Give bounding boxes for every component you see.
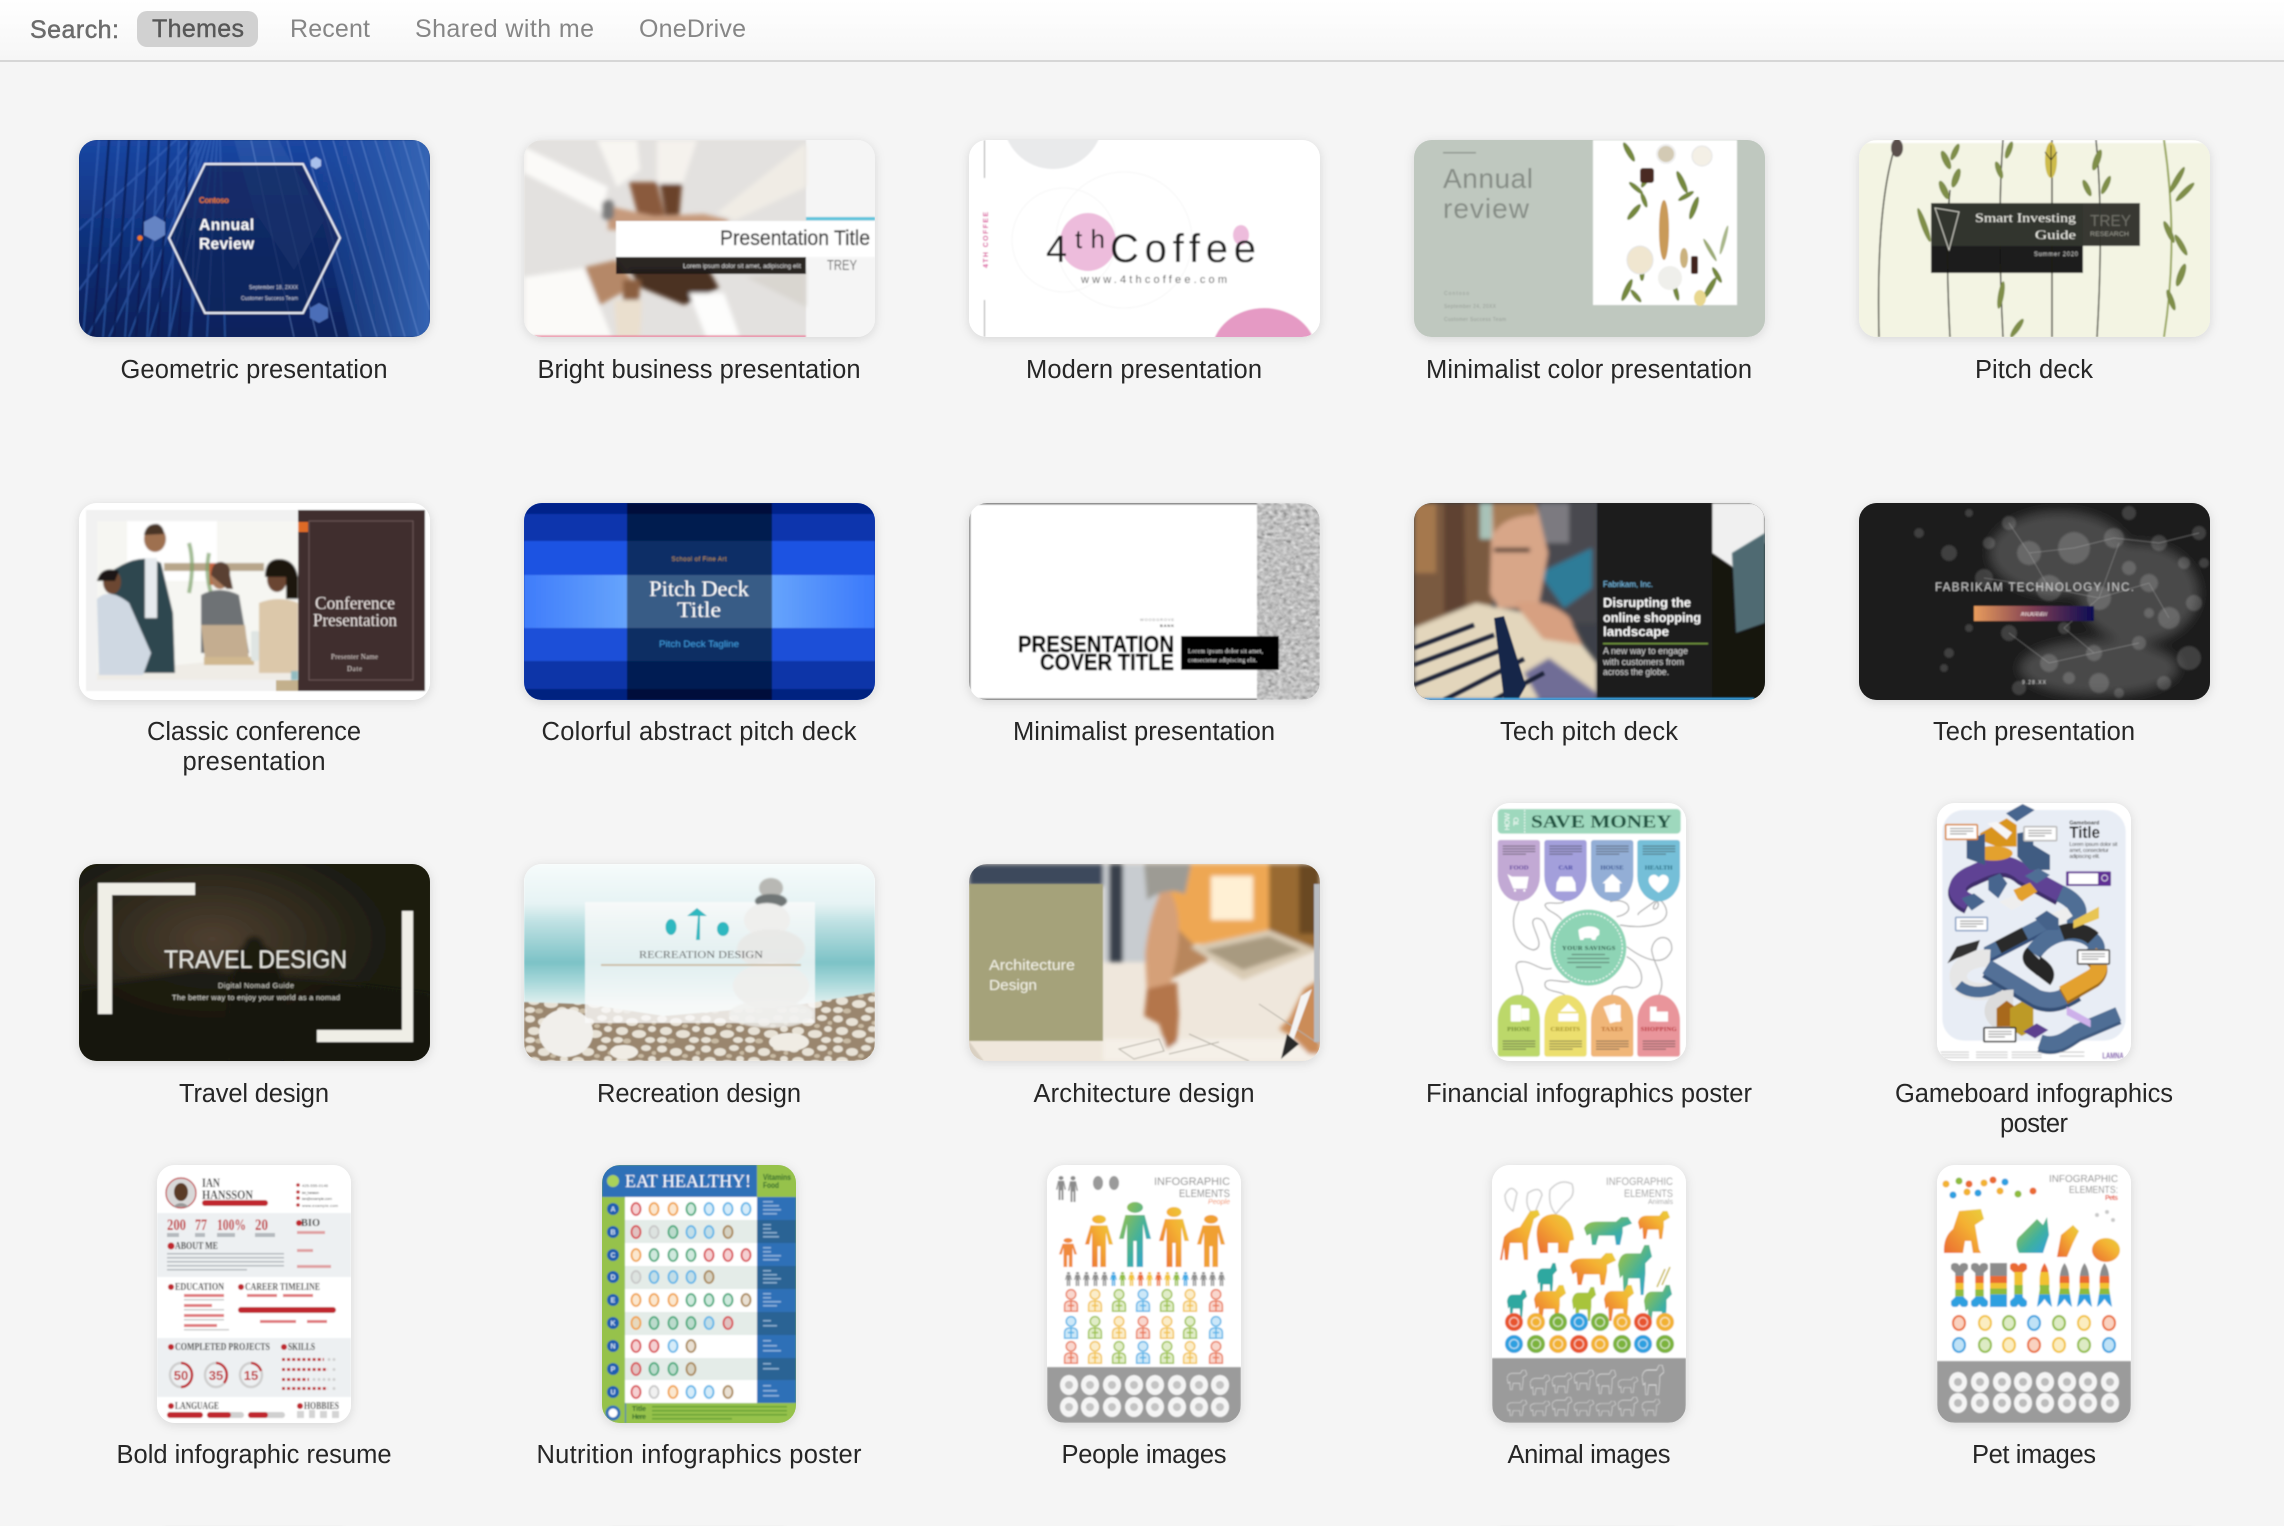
statistics: 77: [195, 1217, 207, 1234]
heading: INFOGRAPHIC: [1606, 1176, 1673, 1188]
strings: [1514, 900, 1672, 998]
panel: Minimalist color presentation: review: [1443, 193, 1530, 224]
gray footer with round icons: [1937, 1361, 2131, 1423]
bottom tags: SHOPPING: [1641, 1026, 1677, 1033]
occupation icons: [1065, 1290, 1222, 1363]
header: [602, 1165, 796, 1197]
panel: Minimalist color presentation: Customer Success Team: [1444, 317, 1506, 323]
section headings: LANGUAGE: [175, 1401, 219, 1412]
food icons: [632, 1203, 750, 1398]
label: Recreation design: [597, 1080, 801, 1108]
label: Travel design: [179, 1080, 329, 1108]
section headings: ABOUT ME: [175, 1241, 218, 1252]
active tab: Themes: [137, 11, 258, 47]
heading: Pets: [2105, 1195, 2118, 1202]
heading: [1154, 1176, 1230, 1206]
panel: Bright business presentation: Presentation Title: [720, 227, 870, 250]
panel: Minimalist presentation: PRESENTATION: [1018, 631, 1174, 657]
panel: Bright business presentation: Lorem ipsum dolor sit amet, adipiscing elit: [683, 264, 801, 270]
purple callout: [2066, 871, 2111, 886]
skill dots: [282, 1360, 328, 1388]
hands photo: [524, 140, 806, 337]
bottom tags: [1498, 995, 1680, 1057]
panel: Gameboard infographics poster: [1895, 803, 2173, 1138]
title: [2069, 821, 2118, 860]
label: [147, 718, 361, 776]
grass stems: [1879, 140, 2172, 337]
letter badges: [607, 1203, 619, 1398]
large figures: [1059, 1202, 1225, 1267]
panel: Nutrition infographics poster: A: [610, 1206, 616, 1214]
label: Colorful abstract pitch deck: [542, 718, 857, 746]
logo text: 4: [1046, 229, 1067, 271]
slide text: Fabrikam, Inc.: [1603, 580, 1653, 589]
panel: Minimalist presentation: [969, 503, 1327, 746]
dark title box: Summer 2020: [2034, 252, 2079, 258]
panel: Geometric presentation: Review: [199, 236, 255, 253]
label: Minimalist presentation: [1013, 718, 1275, 746]
panel: Minimalist presentation: COVER TITLE: [1040, 649, 1174, 675]
footer: [602, 1403, 796, 1423]
table rows: [602, 1197, 796, 1403]
profile header: IAN: [202, 1175, 220, 1190]
section headings: [175, 1218, 339, 1412]
heading: ELEMENTS: [1179, 1188, 1230, 1200]
heading: ELEMENTS: [1624, 1188, 1673, 1200]
animal badges: [1505, 1313, 1674, 1353]
panel: Nutrition infographics poster: N: [610, 1344, 616, 1350]
panel: Minimalist color presentation: Contoso: [1444, 291, 1469, 297]
section headings: HOBBIES: [304, 1401, 339, 1412]
title: adipiscing elit.: [2069, 854, 2100, 860]
slide title: WOODGROVE: [1140, 617, 1174, 622]
slide title: Conference: [315, 593, 395, 613]
dark title box: [1931, 203, 2140, 273]
panel: Geometric presentation: Annual: [199, 217, 254, 234]
colour animals: [1500, 1210, 1672, 1325]
panel: Tech pitch deck: A new way to engage: [1603, 646, 1688, 656]
tab: Shared with me: Shared with me: [415, 15, 594, 43]
board path: [1957, 865, 2118, 1046]
section headings: EDUCATION: [175, 1282, 225, 1293]
panel: Bright business presentation: TREY: [827, 257, 857, 274]
profile header: ian_hansson: [302, 1190, 319, 1195]
header: Vitamins: [763, 1173, 791, 1182]
heading: INFOGRAPHIC: [2049, 1174, 2118, 1185]
tab: OneDrive: OneDrive: [639, 15, 746, 43]
footer: Title: [632, 1406, 646, 1413]
centre column: [627, 503, 772, 700]
teal icons: [666, 908, 729, 940]
section headings: COMPLETED PROJECTS: [175, 1342, 270, 1353]
panel: Geometric presentation: [76, 139, 433, 384]
silhouette: [227, 937, 283, 1061]
building streaks: [79, 140, 227, 337]
panel: Pitch deck: [1859, 139, 2210, 384]
label: Financial infographics poster: [1426, 1080, 1752, 1108]
label: Pet images: [1972, 1441, 2096, 1469]
dark title box: RESEARCH: [2090, 232, 2129, 238]
label: Gameboard infographics: [1895, 1080, 2173, 1108]
panel: Animal images: [1492, 1165, 1686, 1469]
statistics: 20: [255, 1217, 268, 1234]
olive title panel: [969, 884, 1103, 1041]
footer: LAMNA: [2102, 1052, 2124, 1061]
paw prints: [1942, 1176, 2036, 1198]
label: Pitch deck: [1975, 356, 2093, 384]
panel: Tech pitch deck: with customers from: [1602, 657, 1684, 667]
label: Tech pitch deck: [1500, 718, 1678, 746]
meeting photo: [97, 521, 298, 680]
panel: Classic conference presentation: Presentation: [313, 610, 397, 630]
heading: People: [1208, 1199, 1230, 1206]
section headings: BIO: [301, 1218, 320, 1229]
header banner: HOW: [1503, 813, 1512, 830]
panel: Modern presentation: [966, 139, 1323, 384]
slide title: RECREATION DESIGN: [639, 949, 763, 961]
panel: Nutrition infographics poster: U: [610, 1390, 616, 1396]
footer: [1941, 1052, 2124, 1061]
sea animal outlines: [1505, 1182, 1573, 1215]
title: Title: [2069, 823, 2100, 842]
statistics: 200: [167, 1217, 186, 1234]
search label: Search:: [30, 16, 119, 44]
label: Architecture design: [1034, 1080, 1254, 1108]
panel: Minimalist color presentation: [1414, 140, 1765, 384]
panel: Bold infographic resume: [116, 1165, 392, 1469]
panel: Modern presentation: www.4thcoffee.com: [1080, 274, 1227, 286]
label: Tech presentation: [1933, 718, 2135, 746]
panel: Modern presentation: th: [1075, 224, 1105, 254]
label: Animal images: [1508, 1441, 1670, 1469]
panel: Modern presentation: Coffee: [1110, 227, 1256, 271]
gray footer with animal outlines: [1492, 1358, 1686, 1423]
label: People images: [1062, 1441, 1226, 1469]
header banner: TO: [1511, 817, 1520, 826]
header banner: [1498, 809, 1681, 834]
panel: Classic conference presentation: [79, 503, 430, 776]
panel: Travel design: The better way to enjoy your world as a nomad: [172, 993, 340, 1002]
label: Bright business presentation: [538, 356, 860, 384]
title: Gameboard: [2069, 821, 2099, 827]
profile header: www.example.com: [302, 1203, 339, 1208]
pets: [1944, 1209, 2120, 1262]
panel: Architecture design: Architecture: [989, 957, 1075, 974]
statistics: [167, 1217, 268, 1234]
gray footer with round icons: [1047, 1367, 1241, 1423]
project rings: [170, 1363, 262, 1387]
panel: Geometric presentation: September 18, 2XXX: [249, 285, 299, 291]
tab: Recent: Recent: [290, 15, 370, 43]
panel: Travel design: Digital Nomad Guide: [218, 981, 294, 990]
slide title: FABRIKAM TECHNOLOGY INC.: [1935, 582, 2134, 594]
slide title: TRAVEL DESIGN: [164, 946, 347, 974]
title: Lorem ipsum dolor sit: [2069, 842, 2118, 848]
profile header: HANSSON: [202, 1187, 253, 1202]
gray icons: [1056, 1176, 1078, 1202]
profile header: ian@example.com: [302, 1196, 333, 1201]
panel: Tech pitch deck: landscape: [1603, 624, 1669, 639]
label: Modern presentation: [1026, 356, 1262, 384]
dark title box: Smart Investing: [1975, 210, 2077, 225]
panel: Financial infographics poster: [1426, 803, 1752, 1108]
label: Bold infographic resume: [116, 1441, 392, 1469]
profile header: 425-555-0146: [302, 1183, 329, 1188]
pebbles: [524, 992, 875, 1061]
panel: Bold infographic resume: 35: [209, 1368, 223, 1383]
panel: Nutrition infographics poster: [536, 1165, 862, 1469]
panel: Architecture design: Design: [989, 977, 1037, 994]
panel: Nutrition infographics poster: C: [610, 1252, 616, 1260]
header banner: SAVE MONEY: [1531, 812, 1672, 832]
panel: Tech presentation: [1859, 503, 2210, 746]
panel: Colorful abstract pitch deck: [524, 503, 875, 746]
panel: Classic conference presentation: Date: [347, 665, 362, 673]
fish: [2037, 1263, 2112, 1307]
panel: Nutrition infographics poster: B: [610, 1230, 616, 1236]
header: Food: [763, 1181, 779, 1190]
panel: Nutrition infographics poster: K: [610, 1320, 616, 1328]
board blocks: [1947, 804, 2099, 1038]
panel: People images: [1047, 1165, 1241, 1469]
label: Minimalist color presentation: [1426, 356, 1752, 384]
bottom tags: CREDITS: [1551, 1026, 1580, 1033]
panel: Tech pitch deck: [1414, 503, 1765, 746]
label: Nutrition infographics poster: [536, 1441, 862, 1469]
label: presentation: [182, 748, 326, 776]
top tags: [1498, 840, 1680, 901]
bottom tags: PHONE: [1507, 1026, 1531, 1033]
panel: Minimalist presentation: consectetur adipiscing elit.: [1188, 658, 1258, 664]
section headings: CAREER TIMELINE: [245, 1282, 320, 1293]
panel: Colorful abstract pitch deck: Pitch Deck: [649, 576, 749, 601]
panel: Tech presentation: 9.28.XX: [2022, 680, 2047, 686]
panel: Pet images: [1937, 1165, 2131, 1469]
title: amet, consectetur: [2069, 848, 2109, 854]
stacked stones: [729, 878, 813, 1028]
tag icons: [1507, 874, 1669, 893]
heading: ELEMENTS:: [2069, 1185, 2118, 1196]
panel: Nutrition infographics poster: P: [611, 1366, 616, 1374]
top tags: CAR: [1558, 865, 1573, 872]
slide title: Annual: [1443, 163, 1533, 194]
panel: Minimalist color presentation: September 24, 20XX: [1444, 304, 1497, 310]
label: Geometric presentation: [120, 356, 388, 384]
bottom tags: TAXES: [1601, 1026, 1623, 1033]
panel: Bold infographic resume: 15: [244, 1368, 258, 1383]
profile header: [166, 1175, 339, 1208]
bottom tag icons: [1511, 1003, 1668, 1023]
botanical items: [1619, 141, 1730, 304]
heading: [2049, 1174, 2118, 1202]
wood texture: [1257, 503, 1327, 700]
header: EAT HEALTHY!: [625, 1171, 751, 1191]
vertical brand text: 4TH COFFEE: [983, 212, 990, 268]
about text: [167, 1233, 284, 1270]
panel: Architecture design: [969, 864, 1320, 1108]
panel: Nutrition infographics poster: E: [611, 1298, 616, 1304]
photo: [969, 864, 1320, 1061]
education and timeline: [184, 1294, 327, 1327]
bones: [1951, 1263, 2027, 1307]
top tags: FOOD: [1509, 865, 1529, 872]
panel: Colorful abstract pitch deck: Title: [677, 597, 721, 622]
label: [1895, 1080, 2173, 1138]
label: poster: [2000, 1110, 2068, 1138]
panel: Tech presentation: ANNUAL REVIEW: [2020, 612, 2048, 618]
active tab: Themes: Themes: [152, 15, 244, 43]
row of small figures: [1065, 1272, 1225, 1286]
search toolbar: [0, 0, 2284, 62]
top tags: HEALTH: [1645, 865, 1673, 872]
pet icons: [1953, 1316, 2115, 1352]
glow clouds: [1989, 511, 2199, 696]
panel: Minimalist presentation: BANK: [1160, 623, 1174, 628]
dark title box: TREY: [2090, 213, 2131, 230]
black caption box: [1181, 636, 1279, 670]
section headings: SKILLS: [288, 1342, 315, 1353]
dark title box: Guide: [2035, 227, 2076, 242]
panel: Geometric presentation: Customer Success Team: [241, 296, 298, 302]
heading: INFOGRAPHIC: [1154, 1176, 1230, 1188]
bokeh network: [1914, 506, 2209, 698]
corner frame: [98, 883, 195, 1014]
central savings circle: [1550, 910, 1626, 986]
panel: Minimalist presentation: Lorem ipsum dolor sit amet,: [1188, 649, 1264, 655]
hexagon frame: [169, 164, 340, 313]
central savings circle: YOUR SAVINGS: [1562, 945, 1616, 952]
translucent panel: [585, 902, 815, 1023]
panel: Recreation design: [524, 864, 875, 1108]
heading: Animals: [1648, 1199, 1674, 1206]
top tags: HOUSE: [1600, 865, 1624, 872]
panel: Bright business presentation: [524, 140, 875, 384]
footer: Here: [632, 1414, 646, 1421]
panel: Tech pitch deck: Disrupting the: [1603, 595, 1691, 610]
panel: Tech pitch deck: across the globe.: [1603, 667, 1669, 677]
callout boxes: [1946, 825, 2109, 1042]
photo of girl at laptop: [1414, 503, 1597, 700]
panel: Nutrition infographics poster: D: [610, 1274, 616, 1282]
slide title: Contoso: [199, 196, 229, 205]
slide title: School of Fine Art: [672, 557, 727, 563]
label: Classic conference: [147, 718, 361, 746]
panel: Tech pitch deck: online shopping: [1603, 610, 1701, 625]
panel: Classic conference presentation: Presenter Name: [331, 653, 378, 661]
heading: [1606, 1176, 1674, 1206]
language bars: [167, 1412, 285, 1418]
statistics: 100%: [217, 1217, 246, 1234]
title band: [616, 221, 875, 257]
panel: Bold infographic resume: 50: [174, 1368, 188, 1383]
panel: Travel design: [79, 864, 430, 1108]
panel: Colorful abstract pitch deck: Pitch Deck Tagline: [659, 639, 739, 649]
